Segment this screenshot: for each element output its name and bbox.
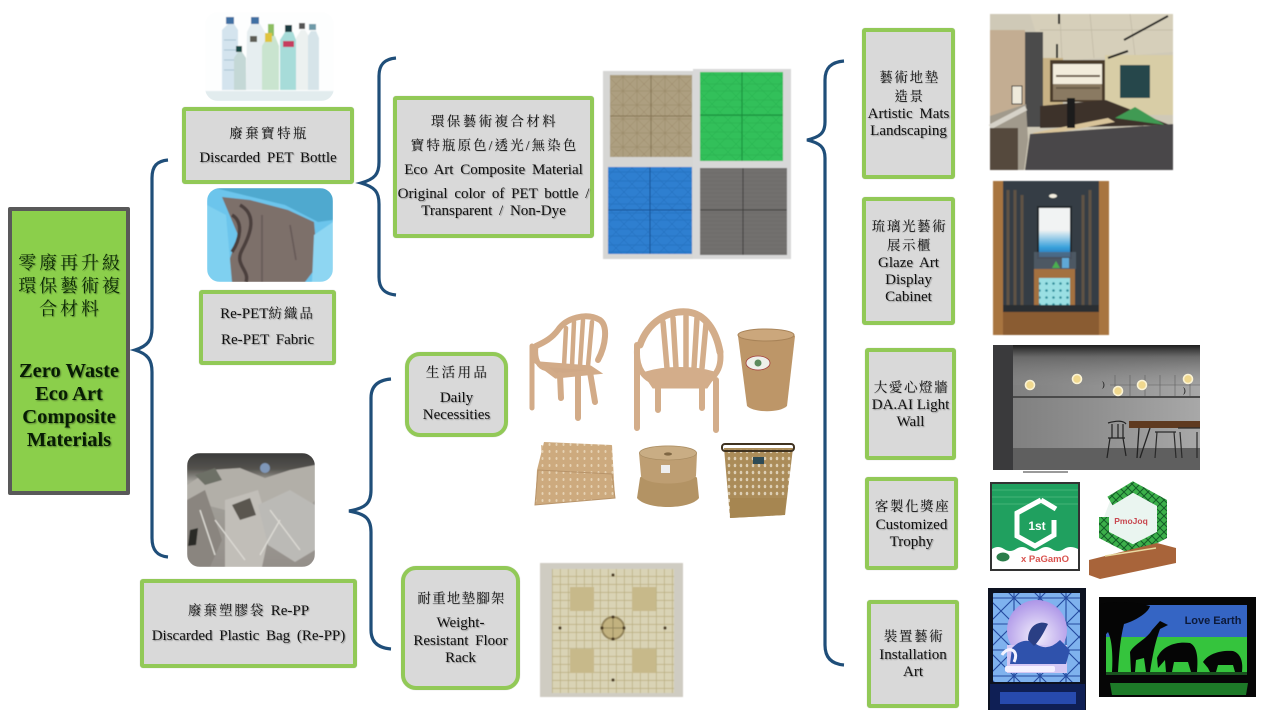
label: eco art composite material: Eco Art Composite Material [404, 162, 583, 178]
brace: PET to eco art composite [361, 58, 396, 295]
label: discarded plastic bag: 廢棄塑膠袋 Re-PP [188, 603, 309, 619]
label: Re-PET fabric: Re-PET Fabric [221, 332, 314, 348]
label: eco art composite material: Original color of PET bottle / [398, 186, 589, 202]
label: glaze art display cabinet: Glaze Art [878, 255, 939, 271]
label: daily necessities: 生活用品 [426, 365, 489, 380]
label: eco art composite material: Transparent / Non-Dye [421, 203, 566, 219]
photo: artistic mats interior [990, 14, 1173, 170]
photo: hexagon trophy: PmoJoq [1114, 516, 1148, 526]
icon: laundry hamper [722, 444, 794, 518]
photo: four colored composite tiles [603, 69, 791, 259]
label: weight-resistant floor rack: 耐重地墊腳架 [417, 591, 506, 606]
photo: Love Earth installation art: Love Earth [1185, 615, 1242, 627]
label: glaze art display cabinet: Cabinet [885, 289, 932, 305]
label: installation art: Art [903, 664, 923, 680]
photo: floor rack [540, 563, 683, 697]
main heading box: 環保藝術複 [18, 276, 123, 296]
label: Re-PET fabric [199, 290, 336, 365]
label: DA.AI light wall [865, 348, 956, 460]
label: artistic mats landscaping: 藝術地墊 [879, 70, 940, 85]
label: discarded plastic bag: Discarded Plastic Bag (Re-PP) [152, 628, 345, 644]
label: artistic mats landscaping: 造景 [894, 89, 925, 104]
heading: English title: Zero Waste [19, 360, 119, 382]
label: artistic mats landscaping [862, 28, 955, 179]
photo: trophy plaque: x PaGamO [1021, 554, 1069, 565]
label: eco art composite material: 寶特瓶原色/透光/無染色 [411, 138, 578, 153]
label: artistic mats landscaping: Landscaping [870, 123, 947, 139]
label: customized trophy: Trophy [890, 534, 933, 550]
label: artistic mats landscaping: Artistic Mats [868, 106, 949, 122]
label: weight-resistant floor rack [401, 566, 520, 690]
label: eco art composite material: 環保藝術複合材料 [431, 114, 558, 129]
photo: Love Earth installation art [1099, 597, 1256, 697]
photo: trophy plaque: 1st [1028, 519, 1046, 533]
label: weight-resistant floor rack: Resistant Floor [413, 633, 508, 649]
label: weight-resistant floor rack: Weight- [437, 615, 484, 631]
photo: PET bottles [205, 12, 334, 101]
photo: hexagon trophy [1089, 487, 1176, 579]
brace: composite to applications [807, 61, 844, 665]
icon: beige chair large [637, 312, 720, 430]
label: glaze art display cabinet: 展示櫃 [887, 238, 932, 253]
icon: beige bucket [738, 329, 795, 411]
label: glaze art display cabinet [862, 197, 955, 325]
icon: beige chair small [532, 316, 605, 418]
photo: plastic bags [187, 453, 315, 567]
label: DA.AI light wall: 大愛心燈牆 [874, 380, 949, 395]
main heading box: Materials [27, 429, 111, 451]
main heading box: Eco Art [35, 383, 103, 405]
brace: PP to products [349, 379, 391, 649]
photo: DA.AI light wall [993, 345, 1200, 473]
label: eco art composite material [393, 96, 594, 238]
heading: Chinese title: 零廢再升級 [18, 253, 123, 273]
main heading box [8, 207, 130, 495]
label: customized trophy: 客製化獎座 [875, 499, 950, 514]
label: discarded PET bottle: Discarded PET Bottle [199, 150, 337, 166]
label: DA.AI light wall: DA.AI Light [872, 397, 949, 413]
label: installation art: Installation [879, 647, 947, 663]
label: weight-resistant floor rack: Rack [445, 650, 476, 666]
photo: trophy plaque [991, 483, 1079, 570]
label: customized trophy [865, 477, 958, 570]
label: discarded plastic bag [140, 579, 357, 668]
label: daily necessities [405, 352, 508, 437]
label: installation art [867, 600, 959, 708]
label: customized trophy: Customized [876, 517, 947, 533]
brace: main to sources [135, 160, 168, 557]
label: glaze art display cabinet: 琉璃光藝術 [872, 219, 947, 234]
label: discarded PET bottle [182, 107, 354, 184]
label: daily necessities: Daily [440, 390, 473, 406]
label: discarded PET bottle: 廢棄寶特瓶 [229, 126, 309, 141]
main heading box: 合材料 [39, 299, 102, 319]
label: Re-PET fabric: Re-PET紡織品 [220, 306, 315, 322]
photo: glaze art display cabinet [993, 181, 1109, 335]
label: installation art: 裝置藝術 [884, 629, 944, 644]
icon: round stool [637, 446, 699, 507]
label: DA.AI light wall: Wall [897, 414, 924, 430]
photo: Re-PET fabric [207, 188, 333, 282]
main heading box: Composite [22, 406, 116, 428]
photo: dolphin installation art [988, 588, 1086, 710]
icon: perforated square basket [535, 442, 615, 505]
label: glaze art display cabinet: Display [885, 272, 932, 288]
label: daily necessities: Necessities [423, 407, 490, 423]
